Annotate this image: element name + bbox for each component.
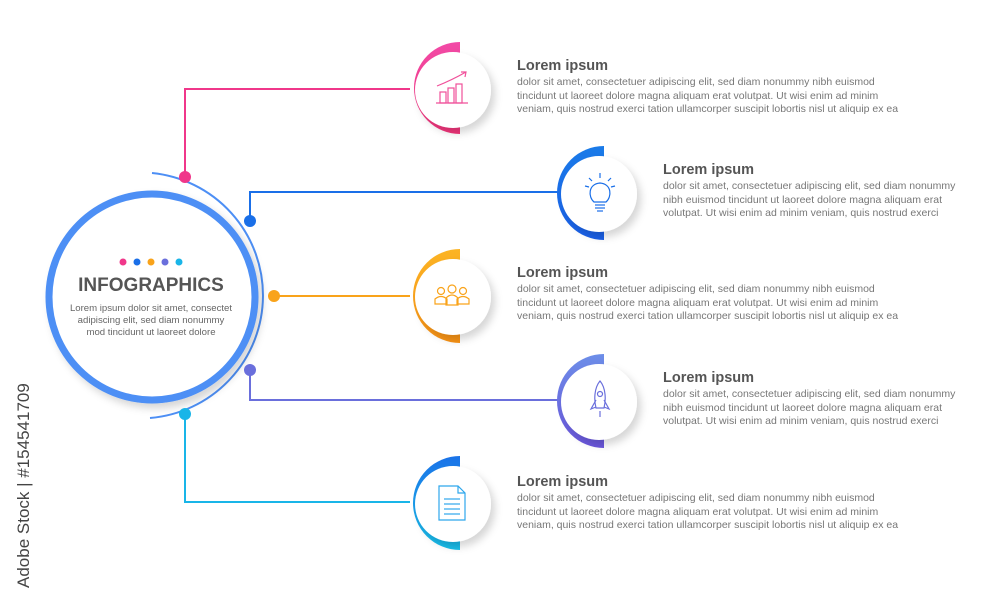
text: item 4: Lorem ipsum [663, 370, 754, 386]
text: item 3 [517, 265, 898, 322]
text: item 4: dolor sit amet, consectetuer adipiscing elit, sed diam nonummy [663, 388, 955, 400]
icon: people [435, 285, 469, 305]
text: item 2: Lorem ipsum [663, 162, 754, 178]
text: item 1 [517, 58, 898, 115]
item 3 badge [413, 249, 491, 343]
connector lines [185, 89, 558, 502]
text: item 3: tincidunt ut laoreet dolore magna aliquam erat volutpat. Ut wisi enim ad minim [517, 297, 878, 309]
item 4 badge [557, 354, 637, 448]
text: item 5: tincidunt ut laoreet dolore magna aliquam erat volutpat. Ut wisi enim ad minim [517, 506, 878, 518]
text: item 1: Lorem ipsum [517, 58, 608, 74]
watermark id: Adobe Stock | #154541709 [14, 383, 33, 588]
center text [70, 303, 232, 338]
icon: document [439, 486, 465, 520]
text: item 3: dolor sit amet, consectetuer adipiscing elit, sed diam nonummy nibh euismod [517, 283, 875, 295]
center text: adipiscing elit, sed diam nonummy [78, 315, 225, 326]
center text: Lorem ipsum dolor sit amet, consectet [70, 303, 232, 314]
text: item 5 [517, 474, 898, 531]
text: item 5: dolor sit amet, consectetuer adipiscing elit, sed diam nonummy nibh euismod [517, 492, 875, 504]
main circle [49, 194, 255, 400]
center title: INFOGRAPHICS [78, 275, 224, 296]
center text: mod tincidunt ut laoreet dolore [86, 327, 216, 338]
text: item 1: tincidunt ut laoreet dolore magna aliquam erat volutpat. Ut wisi enim ad minim [517, 90, 878, 102]
text: item 5: Lorem ipsum [517, 474, 608, 490]
text: item 5: veniam, quis nostrud exerci tation ullamcorper suscipit lobortis nisl ut aliquip ex ea [517, 519, 898, 531]
center header dots [120, 258, 182, 266]
text: item 2: nibh euismod tincidunt ut laoreet dolore magna aliquam erat [663, 194, 942, 206]
text: item 1: veniam, quis nostrud exerci tation ullamcorper suscipit lobortis nisl ut aliquip ex ea [517, 103, 898, 115]
text: item 1: dolor sit amet, consectetuer adipiscing elit, sed diam nonummy nibh euismod [517, 76, 875, 88]
text: item 3: veniam, quis nostrud exerci tation ullamcorper suscipit lobortis nisl ut aliquip ex ea [517, 310, 898, 322]
text: item 4: nibh euismod tincidunt ut laoreet dolore magna aliquam erat [663, 402, 942, 414]
icon: rocket [591, 381, 609, 417]
item 2 badge [557, 146, 637, 240]
icon: bulb [585, 173, 615, 211]
text: item 2: volutpat. Ut wisi enim ad minim veniam, quis nostrud exerci [663, 207, 938, 219]
connection dots [179, 171, 280, 420]
item 1 badge [414, 42, 491, 134]
icon: chart [436, 72, 468, 103]
text: item 4 [663, 370, 956, 427]
text: item 2 [663, 162, 956, 219]
outer arc [150, 173, 263, 418]
item 5 badge [413, 456, 491, 550]
text: item 2: dolor sit amet, consectetuer adipiscing elit, sed diam nonummy [663, 180, 955, 192]
text: item 3: Lorem ipsum [517, 265, 608, 281]
text: item 4: volutpat. Ut wisi enim ad minim veniam, quis nostrud exerci [663, 415, 938, 427]
